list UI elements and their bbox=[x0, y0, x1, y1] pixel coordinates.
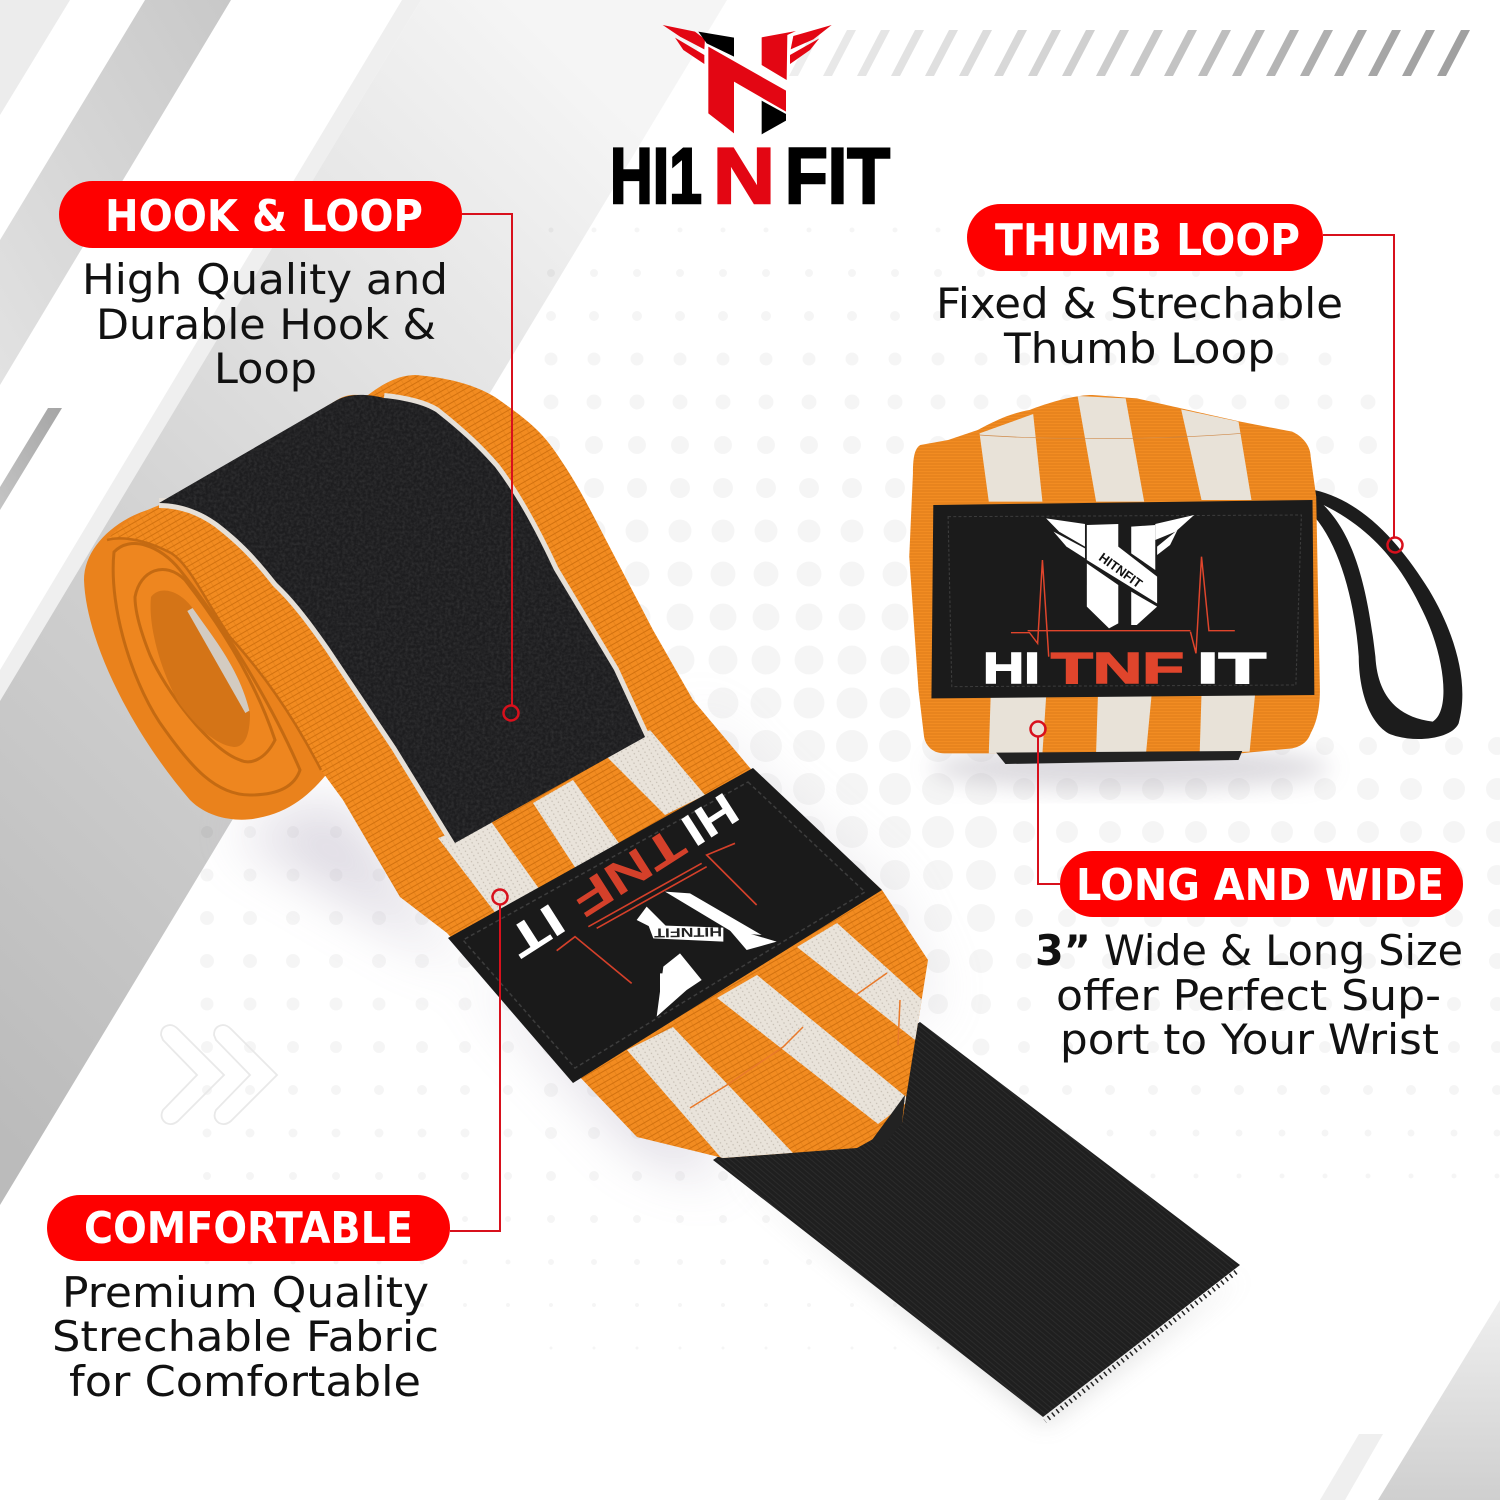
description bbox=[82, 255, 448, 393]
description: Strechable Fabric bbox=[52, 1312, 439, 1361]
label wordmark: TNF bbox=[1051, 644, 1184, 693]
logo wordmark bbox=[610, 131, 890, 220]
fold line bbox=[980, 433, 1242, 439]
callout: hook and loop bbox=[59, 181, 462, 393]
badge wordmark: HI bbox=[673, 783, 748, 857]
pill label: HOOK & LOOP bbox=[105, 191, 423, 242]
black woven badge bbox=[448, 768, 882, 1083]
label heartbeat line bbox=[1011, 557, 1235, 657]
thin white edge lines bbox=[159, 398, 645, 843]
logo wordmark: N bbox=[713, 131, 775, 220]
description: port to Your Wrist bbox=[1060, 1015, 1439, 1064]
description: Loop bbox=[214, 344, 317, 393]
product shadows bbox=[230, 700, 1330, 1425]
icon: double chevron bbox=[161, 1025, 277, 1124]
thumb loop bbox=[1314, 490, 1462, 739]
label wordmark: IT bbox=[1197, 644, 1266, 693]
description bbox=[1035, 926, 1463, 1064]
callout: long and wide bbox=[1035, 851, 1463, 1064]
description: Fixed & Strechable bbox=[936, 279, 1343, 328]
connector: comfortable bbox=[450, 890, 508, 1231]
connector: thumb loop bbox=[1323, 235, 1402, 552]
black label bbox=[931, 500, 1314, 698]
description: for Comfortable bbox=[69, 1357, 421, 1406]
product: folded wrist wrap with thumb loop bbox=[909, 395, 1462, 764]
connector: hook and loop bbox=[462, 214, 518, 720]
halftone dot pattern bbox=[207, 230, 1500, 1348]
product: rolled wrist wrap bbox=[84, 375, 1240, 1421]
description bbox=[936, 279, 1343, 373]
badge wordmark bbox=[498, 783, 748, 968]
description: Thumb Loop bbox=[1003, 324, 1275, 373]
label emblem bbox=[1046, 515, 1194, 628]
logo: HITNFIT brand mark bbox=[610, 25, 890, 220]
description bbox=[52, 1268, 439, 1406]
pill label: THUMB LOOP bbox=[995, 215, 1300, 266]
connector: long and wide bbox=[1030, 722, 1060, 884]
description: Premium Quality bbox=[62, 1268, 429, 1317]
black tail strap bbox=[713, 1022, 1240, 1421]
velcro edge bbox=[996, 751, 1242, 764]
pill label bbox=[59, 181, 462, 248]
pill label: COMFORTABLE bbox=[84, 1203, 413, 1254]
black tip bbox=[872, 1095, 905, 1150]
orange band and strap bbox=[107, 375, 928, 1158]
strap stitching bbox=[690, 973, 900, 1108]
badge wordmark: IT bbox=[498, 894, 574, 968]
wrap body bbox=[909, 395, 1320, 753]
callout: comfortable bbox=[47, 1195, 450, 1406]
badge emblem bbox=[557, 843, 777, 1017]
description: offer Perfect Sup- bbox=[1056, 971, 1441, 1020]
logo emblem bbox=[663, 25, 832, 134]
callout: thumb loop bbox=[936, 204, 1343, 373]
description: 3” Wide & Long Size bbox=[1035, 926, 1463, 975]
logo wordmark: FIT bbox=[785, 131, 890, 220]
background stripes top right bbox=[789, 30, 1470, 76]
coil side of roll bbox=[84, 507, 330, 820]
pill label: LONG AND WIDE bbox=[1076, 860, 1444, 911]
white stripes bbox=[980, 396, 1255, 753]
label wordmark bbox=[983, 644, 1266, 693]
white stripes on strap bbox=[438, 730, 928, 1160]
hook and loop velcro patch bbox=[159, 395, 645, 843]
label wordmark: HI bbox=[983, 644, 1040, 693]
product: folded wrist wrap with thumb loop: HITNFIT bbox=[1096, 550, 1145, 591]
black woven badge: HITNFIT bbox=[654, 924, 722, 941]
logo wordmark: HI1 bbox=[610, 131, 702, 220]
description: High Quality and bbox=[82, 255, 448, 304]
description: Durable Hook & bbox=[96, 300, 436, 349]
badge wordmark: TNF bbox=[562, 817, 695, 927]
